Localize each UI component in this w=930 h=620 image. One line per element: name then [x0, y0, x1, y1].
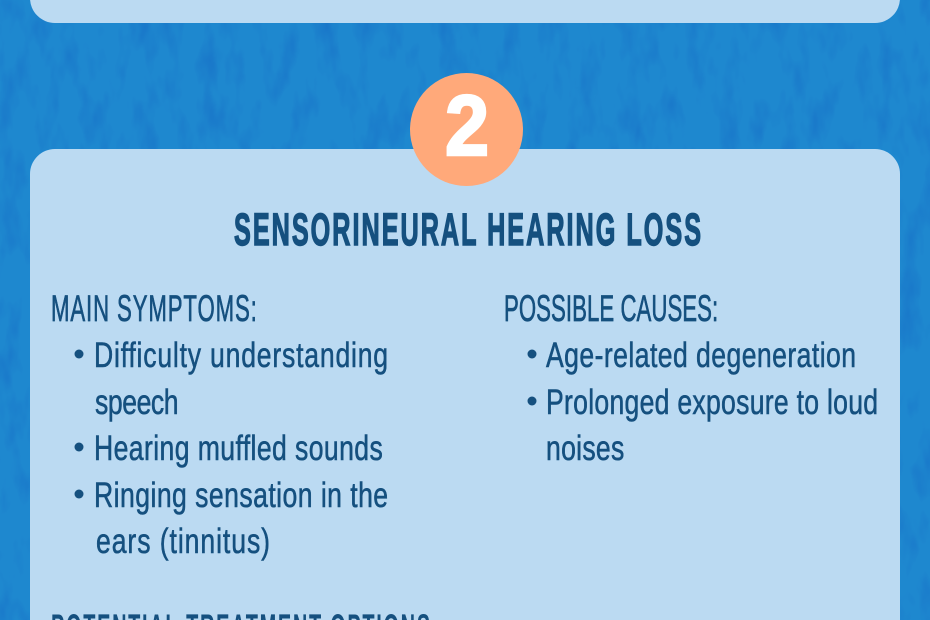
text block: possible causes — [504, 288, 878, 468]
bullet list: causes: Age-related degeneration — [546, 335, 856, 375]
bullet list: symptoms: Ringing sensation in the — [94, 475, 388, 515]
heading: section title: SENSORINEURAL HEARING LOSS — [234, 204, 701, 255]
bullet list: symptoms: Difficulty understanding — [94, 335, 388, 375]
text block: main symptoms — [51, 288, 388, 561]
bullet list: causes — [528, 335, 878, 468]
subheading: main symptoms: MAIN SYMPTOMS: — [51, 288, 257, 329]
bullet list: symptoms: Hearing muffled sounds — [94, 428, 383, 468]
panel: previous section bottom — [30, 0, 900, 23]
number badge: 2: 2 — [445, 79, 489, 174]
number badge: 2 — [410, 73, 523, 186]
bullet list: symptoms — [74, 335, 388, 561]
subheading: possible causes: POSSIBLE CAUSES: — [504, 288, 718, 329]
bullet list: causes: Prolonged exposure to loud — [546, 382, 878, 422]
bullet list: symptoms: ears (tinnitus) — [96, 521, 270, 561]
bullet list: causes: noises — [546, 428, 624, 468]
bullet list: symptoms: speech — [95, 382, 179, 422]
panel: sensorineural hearing loss — [30, 149, 900, 620]
